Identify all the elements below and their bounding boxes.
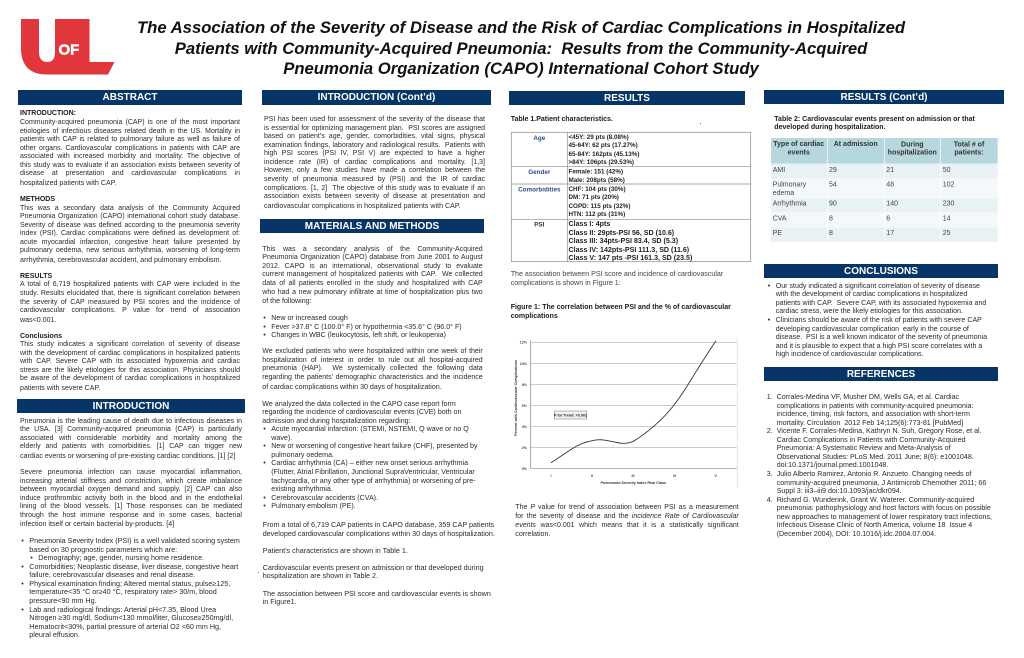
list: references: 3. xyxy=(767,470,773,478)
text: PSI assessment paragraph: severity of pneumonia measured by (PSI) and the IR of cardiac xyxy=(264,176,485,183)
table 1: patient characteristics: Class V: 147 pts -PSI 161.3, SD (23.5) xyxy=(568,254,693,262)
text: abstract body xyxy=(20,110,240,392)
table 2: cardiovascular events xyxy=(771,138,998,242)
list: references: 4. xyxy=(767,496,773,504)
heading: introduction xyxy=(17,399,245,413)
text: P value interpretation: events was<0.001 which means that it is a statistically significant xyxy=(515,522,739,529)
text: methods description: admission and during hospitalization regarding: xyxy=(262,417,411,425)
list: references: Vicente F. Corrales-Medina, Kathryn N. Suh, Gregory Rose, et al. xyxy=(777,427,982,435)
text: abstract body: Community-acquired pneumonia (CAP) is one of the most important xyxy=(20,119,240,126)
text: methods description: Pneumonia Organization (CAPO) database from June 2001 to August xyxy=(262,254,483,261)
table 2: cardiovascular events: edema xyxy=(773,190,794,197)
text: abstract body: acute myocardial infarction, congestive heart failure presented by xyxy=(20,239,240,246)
text: abstract body: with the development of cardiac complications in hospitalized patients xyxy=(20,350,240,357)
text: abstract body: METHODS xyxy=(20,196,55,203)
list: conclusions: and it is plausible to expect that a high PSI score correlates with a xyxy=(776,342,982,350)
text: cohort summary: From a total of 6,719 CAP patients in CAPO database, 359 CAP patients xyxy=(263,520,494,529)
table 2: cardiovascular events: During xyxy=(901,141,924,148)
list: conclusions: high incidence of cardiovascular complications. xyxy=(776,350,924,358)
text: methods description: pulmonary oedema. xyxy=(271,451,334,459)
table 2: cardiovascular events: 50 xyxy=(943,166,951,173)
caption: table 1: Table 1.Patient characteristics. xyxy=(511,116,613,123)
panel: references xyxy=(764,367,998,538)
table 2: cardiovascular events: 21 xyxy=(886,166,894,173)
table 2: cardiovascular events: 25 xyxy=(943,230,951,237)
text: PSI assessment paragraph: PSI has been used for assessment of the severity of the disease that xyxy=(264,116,485,123)
table 1: patient characteristics: Age xyxy=(533,135,546,142)
table 1: patient characteristics: DM: 71 pts (20%) xyxy=(568,194,619,201)
title: Pneumonia Organization (CAPO) International Cohort Study xyxy=(283,59,759,78)
heading: references: REFERENCES xyxy=(847,369,915,380)
table 2: cardiovascular events: 8 xyxy=(829,230,833,237)
text: methods description: regarding the patients’ demographic characteristics and the incidence xyxy=(262,374,483,381)
title: The Association of the Severity of Disease and the Risk of Cardiac Complications in Hospitalized xyxy=(137,18,905,37)
list: conclusions: patients with CAP. Severe CAP, with its associated hypoxemia and xyxy=(776,299,986,307)
text: abstract body: RESULTS xyxy=(20,273,52,280)
list: references: Corrales-Medina VF, Musher DM, Wells GA, et al. Cardiac xyxy=(777,393,959,401)
table 1: patient characteristics: >84Y: 106pts (29.53%) xyxy=(568,159,634,166)
heading: abstract: ABSTRACT xyxy=(102,92,158,103)
text: methods description: current management of hospitalized patients with CAP. We collected xyxy=(262,271,483,278)
table 2: cardiovascular events: Total # of xyxy=(954,141,985,148)
table 2: cardiovascular events: Type of cardiac xyxy=(773,141,824,148)
table 2: cardiovascular events: Arrhythmia xyxy=(773,200,807,207)
text: PSI assessment paragraph xyxy=(264,116,485,210)
text: abstract body: with CAP. Severe CAP with its associated hypoxemia and cardiac xyxy=(20,358,240,365)
table 1: patient characteristics: HTN: 112 pts (31%) xyxy=(568,211,625,218)
text: introduction paragraphs: Pneumonia is the leading cause of death due to infectious diseases in xyxy=(20,418,242,425)
table 2: cardiovascular events: 8 xyxy=(829,215,833,222)
list: references: Pneumonia: A Systematic Review and Meta-Analysis of xyxy=(777,444,951,452)
table 1: patient characteristics: PSI xyxy=(534,222,545,228)
text: methods description: data of all patients enrolled in the study and hospitalized with CAP xyxy=(262,280,483,287)
text: abstract body: Severity of disease was defined according to the pneumonia severity xyxy=(20,222,240,229)
text: abstract body: associated with increased morbidity and mortality. The objective of xyxy=(20,153,240,160)
text: cohort summary: Patient’s characteristics are shown in Table 1. xyxy=(263,546,408,555)
caption: figure 1: complications xyxy=(511,313,558,320)
list: PSI parameters: pleural effusion. xyxy=(29,630,80,639)
text: association note: complications is shown in Figure 1: xyxy=(511,279,621,287)
table 1: patient characteristics: Class II: 29pts-PSI 56, SD (10.6) xyxy=(568,229,675,237)
list: references: complications in patients with community-acquired pneumonia: xyxy=(777,402,973,410)
text: introduction paragraphs: infection itself or certain bacterial by-products. [4] xyxy=(20,520,174,528)
table 2: cardiovascular events: 14 xyxy=(943,215,951,222)
list: references: new approaches to management of lower respiratory tract infections, xyxy=(777,513,992,521)
table 2: cardiovascular events: 48 xyxy=(886,181,894,188)
list: references: incidence, timing, risk factors, and association with short-term xyxy=(777,410,970,418)
table 2: cardiovascular events: 6 xyxy=(886,215,890,222)
list: conclusions: Our study indicated a significant correlation of severity of disease xyxy=(776,282,980,290)
line chart: figure 1: 10% xyxy=(520,362,528,366)
heading: abstract xyxy=(18,90,242,105)
panel: abstract xyxy=(18,90,242,392)
text: abstract body: hospitalized patients with CAP. xyxy=(20,179,116,187)
table 2: cardiovascular events: 230 xyxy=(943,200,954,207)
line chart: figure 1: 6% xyxy=(522,404,528,408)
table 2: cardiovascular events: PE xyxy=(773,230,782,237)
caption: figure 1: Figure 1: The correlation between PSI and the % of cardiovascular xyxy=(511,304,731,311)
list: conclusions: with the development of cardiac complications in hospitalized xyxy=(776,290,967,298)
text: abstract body: the severity of CAP measured by PSI scores and the incidence of xyxy=(20,299,240,306)
text: methods description: This was a secondary analysis of the Community-Acquired xyxy=(262,246,483,253)
text: introduction paragraphs: elderly and patients with comorbidities. [1] CAP can trigger new xyxy=(20,443,242,450)
list: PSI parameters: Lab and radiological findings: Arterial pH<7.35, Blood Urea xyxy=(29,605,216,614)
heading: results continued xyxy=(764,90,1004,104)
text: PSI assessment paragraph: is essential for optimizing management plan. PSI scores are assigned xyxy=(264,125,485,132)
text: introduction paragraphs: between myocardial oxygen demand and supply. [2] CAP can also xyxy=(20,486,242,493)
list: PSI parameters: Demography; age, gender, nursing home residence. xyxy=(38,553,204,562)
text: methods description: 2012. CAPO is an international, observational study to evaluate xyxy=(262,263,483,270)
text: abstract body: etiologies of infectious diseases related death in the US. Mortality in xyxy=(20,128,240,135)
list: references: community-acquired pneumonia, J Antimicrob Chemother 2011; 66 xyxy=(777,479,986,487)
text: introduction paragraphs: through the host immune response and in some cases, bacterial xyxy=(20,512,242,519)
text: P value interpretation: correlation. xyxy=(515,530,550,538)
table 1: patient characteristics: Gender xyxy=(528,169,551,176)
text: abstract body: study. Results elucidated that, there is significant correlation between xyxy=(20,290,240,297)
heading: introduction continued xyxy=(262,90,491,105)
text: methods description: who had a new pulmonary infiltrate at time of hospitalization plus two xyxy=(262,289,483,296)
text: methods description: Cerebrovascular accidents (CVA). xyxy=(271,494,378,502)
caption: table 2: Table 2: Cardiovascular events present on admission or that xyxy=(774,116,975,123)
text: abstract body: this study was to evaluate if an association exists between severity of xyxy=(20,162,240,169)
table 2: cardiovascular events: 140 xyxy=(886,200,898,207)
heading: references xyxy=(764,367,998,381)
text: methods description: wave). xyxy=(271,434,292,442)
table 1: patient characteristics: Class IV: 142pts-PSI 111.3, SD (11.6) xyxy=(568,246,690,254)
list: references: (December 2004), DOI: 10.1016/j.idc.2004.07.004. xyxy=(777,530,936,538)
table 2: cardiovascular events: 102 xyxy=(943,181,954,188)
text: abstract body: arrhythmia, cerebrovascular accident, and pulmonary embolism. xyxy=(20,256,221,264)
text: methods description: Fever >37.8° C (100.0° F) or hypothermia <35.6° C (96.0° F) xyxy=(271,323,462,331)
panel: introduction xyxy=(17,399,245,639)
text: PSI assessment paragraph: association exists between severity of disease at presentation and xyxy=(264,193,485,200)
text: cohort summary: The association between PSI score and cardiovascular events is shown xyxy=(263,589,491,598)
list: references xyxy=(766,393,992,538)
text: introduction paragraphs: cardiac events or worsening of pre-existing cardiac conditions. [1] [2] xyxy=(20,452,235,460)
line chart: figure 1: Percent with Cardiovascular Complications xyxy=(514,360,518,436)
table 2: cardiovascular events: CVA xyxy=(773,215,787,222)
text: association note: The association between PSI score and incidence of cardiovascular xyxy=(511,270,723,278)
panel: materials and methods xyxy=(260,219,495,606)
table 2: cardiovascular events: hospitalization xyxy=(888,149,937,156)
text: PSI assessment paragraph: cardiovascular complications in hospitalized patients with CAP. xyxy=(264,202,461,210)
table 1: patient characteristics: 65-84Y: 162pts (45.13%) xyxy=(568,151,639,158)
text: abstract body: index (PSI). Cardiac complications were defined as development of: xyxy=(20,230,240,237)
text: abstract body: Conclusions xyxy=(20,333,62,340)
text: methods description: We excluded patients who were hospitalized within one week of their xyxy=(262,348,483,355)
text: introduction paragraphs xyxy=(20,418,242,528)
logo: University of Louisville: OF xyxy=(58,42,79,58)
list: references: Julio Alberto Ramirez, Antonio R. Anzueto. Changing needs of xyxy=(777,470,972,478)
line chart: figure 1: Pneumonia Severity Index Risk Class xyxy=(601,481,666,485)
line chart: figure 1 xyxy=(514,337,738,488)
list: conclusions xyxy=(768,282,988,358)
table 1: patient characteristics: COPD: 115 pts (32%) xyxy=(568,203,630,210)
line chart: figure 1: 4% xyxy=(522,425,528,429)
table 1: patient characteristics: CHF: 104 pts (30%) xyxy=(568,186,626,193)
list: references: doi:10.1371/journal.pmed.1001048. xyxy=(777,461,888,469)
list: conclusions: disease. PSI is a well known indicator of the severity of pneumonia xyxy=(776,333,987,341)
table 1: patient characteristics: Class III: 34pts-PSI 83.4, SD (5.3) xyxy=(568,237,679,245)
text: association note xyxy=(510,270,724,287)
logo: University of Louisville xyxy=(21,19,114,74)
text: abstract body: disease at presentation and cardiovascular complications in xyxy=(20,170,240,177)
heading: materials and methods xyxy=(260,219,484,233)
title xyxy=(137,18,906,78)
table 2: cardiovascular events: Pulmonary xyxy=(773,181,807,188)
list: references: 1. xyxy=(767,393,773,401)
text: methods description xyxy=(262,246,483,510)
caption: table 2 xyxy=(774,116,975,131)
heading: introduction: INTRODUCTION xyxy=(93,401,169,412)
text: methods description: of cardiac complications within 30 days of hospitalization. xyxy=(262,383,442,391)
panel: results xyxy=(509,91,752,538)
list: PSI parameters: Physical examination finding; Altered mental status, pulse≥125, xyxy=(29,579,230,588)
text: methods description: Cardiac arrhythmia (CA) – either new onset serious arrhythmia xyxy=(271,459,468,467)
table 1: patient characteristics: Comorbidities xyxy=(518,186,561,194)
line chart: figure 1: 2% xyxy=(522,446,528,450)
text: abstract body: This study indicates a significant correlation of severity of disease xyxy=(20,341,240,348)
table 1: patient characteristics: Class I: 4pts xyxy=(568,220,610,228)
text: abstract body: stress are the likely etiologies for this association. Physicians should xyxy=(20,367,240,374)
text: abstract body: INTRODUCTION: xyxy=(20,110,76,117)
list: PSI parameters: failure, cerebrovascular diseases and renal disease. xyxy=(29,570,195,579)
list: conclusions: cardiac stress, were the likely etiologies for this association. xyxy=(776,307,963,315)
text: P value interpretation: for the severity of disease and the incidence Rate of Cardiovascular xyxy=(515,513,739,520)
table 2: cardiovascular events: AMI xyxy=(773,166,785,173)
heading: results continued: RESULTS (Cont’d) xyxy=(840,92,928,103)
heading: results: RESULTS xyxy=(604,93,650,104)
text: PSI assessment paragraph: incidence rate (IR) of cardiac complications and mortality. [1,3] xyxy=(264,159,485,166)
table 2: cardiovascular events: events xyxy=(788,149,810,156)
text: methods description: hospitalization of interest in order to rule out all hospital-acquired xyxy=(262,357,483,364)
text: abstract body: other organs. Cardiovascular complications in patients with CAP are xyxy=(20,145,240,152)
text: methods description: Changes in WBC (leukocytosis, left shift, or leukopenia) xyxy=(271,331,446,339)
table 1: patient characteristics: Male: 208pts (58%) xyxy=(568,177,625,184)
table 1: patient characteristics: 45-64Y: 62 pts (17.27%) xyxy=(568,142,638,149)
list: references: Cardiac Complications in Patients with Community-Acquired xyxy=(777,436,966,444)
table 1: patient characteristics: Female: 151 (42%) xyxy=(568,168,623,176)
text: methods description: New or increased cough xyxy=(271,314,348,322)
text: cohort summary: Cardiovascular events present on admission or that developed during xyxy=(263,563,484,572)
list: PSI parameters: Hematocrit<30%, partial pressure of arterial O2 <60 mm Hg, xyxy=(29,622,221,631)
text: PSI assessment paragraph: examination findings, laboratory and radiological results. Patients with xyxy=(264,142,485,149)
text: abstract body: be aware of the development of cardiac complications in hospitalized xyxy=(20,375,240,382)
line chart: figure 1: 12% xyxy=(520,340,528,344)
caption: table 2: developed during hospitalization. xyxy=(774,124,886,131)
heading: conclusions: CONCLUSIONS xyxy=(844,266,918,277)
text: abstract body: pulmonary oedema, new serious arrhythmia, worsening of long-term xyxy=(20,247,240,254)
text: P value interpretation xyxy=(515,504,739,538)
text: methods description: Acute myocardial infarction: (STEMI, NSTEMI, Q wave or no Q xyxy=(271,425,469,433)
table 1: patient characteristics xyxy=(510,132,752,262)
list: references: Infectious Disease Clinic of North America, volume 18 Issue 4 xyxy=(777,521,972,529)
text: methods description: existing arrhythmia. xyxy=(271,485,333,493)
text: PSI assessment paragraph: based on patient’s age, gender, comorbidities, vital signs, physical xyxy=(264,133,485,140)
list: conclusions: Clinicians should be aware of the risk of patients with severe CAP xyxy=(776,316,982,324)
list: PSI parameters: Comorbidities; Neoplastic disease, liver disease, congestive heart xyxy=(29,562,238,571)
line chart: figure 1: P for Trend: <0.001 xyxy=(554,413,587,417)
line chart: figure 1: IV xyxy=(673,474,677,478)
list: PSI parameters: based on 30 prognostic parameters which are: xyxy=(29,545,177,554)
text: methods description: regarding the incidence of cardiovascular events (CVE) both on xyxy=(262,408,461,416)
line chart: figure 1: III xyxy=(632,474,634,478)
text: methods description: pneumonia (HAP). We systemically collected the following data xyxy=(262,365,483,372)
text: abstract body: patients with CAP is related to pulmonary failure as well as failure of xyxy=(20,136,240,143)
list: references: Suppl 3: iii3–iii9 doi:10.1093/jac/dkr094. xyxy=(777,487,902,495)
text: methods description: Pulmonary embolism (PE). xyxy=(271,502,356,510)
text: abstract body: patients with severe CAP. xyxy=(20,384,100,392)
table 2: cardiovascular events: At admission xyxy=(834,141,878,148)
list: conclusions: developing cardiovascular complication early in the course of xyxy=(776,325,969,333)
table 2: cardiovascular events: 54 xyxy=(829,181,837,188)
text: introduction paragraphs: the USA. [3] Community-acquired pneumonia (CAP) is particularly xyxy=(20,426,242,433)
list: PSI parameters xyxy=(22,536,240,639)
panel: introduction continued xyxy=(262,90,491,210)
text: introduction paragraphs: Severe pneumonia infection can cause myocardial inflammation, xyxy=(20,469,242,476)
list: references: 2. xyxy=(767,427,773,435)
text: P value interpretation: The P value for trend of association between PSI as a measurement xyxy=(515,504,739,511)
list: references: mortality. Circulation 2012 Feb 14;125(6):773-81 [PubMed] xyxy=(777,419,963,427)
heading: introduction continued: INTRODUCTION (Cont’d) xyxy=(318,92,435,103)
text: abstract body: cardiovascular complications. P value for trend of association xyxy=(20,307,240,314)
line chart: figure 1: II xyxy=(591,474,593,478)
heading: results xyxy=(509,91,745,105)
title: Patients with Community-Acquired Pneumonia: Results from the Community-Acquired xyxy=(175,38,867,58)
text: methods description: We analyzed the data collected in the CAPO case report form xyxy=(262,400,456,408)
list: PSI parameters: pressure<90 mm Hg. xyxy=(29,596,97,605)
text: PSI assessment paragraph: high PSI scores (PSI IV, PSI V) are expected to have a higher xyxy=(264,150,485,157)
heading: conclusions xyxy=(764,264,998,278)
list: references: Richard G. Wunderink, Grant W. Waterer. Community-acquired xyxy=(777,496,974,504)
caption: figure 1 xyxy=(511,304,731,320)
list: references: pneumonia: pathophysiology and host factors with focus on possible xyxy=(777,504,991,512)
table 2: cardiovascular events: patients: xyxy=(954,149,984,156)
line chart: figure 1: 0% xyxy=(522,467,528,471)
text: abstract body: Pneumonia Organization (CAPO) international cohort study database. xyxy=(20,213,240,220)
text: cohort summary: developed cardiovascular complications within 30 days of hospitalization. xyxy=(263,529,495,538)
text: abstract body: A total of 6,719 hospitalized patients with CAP were included in the xyxy=(20,281,240,288)
text: introduction paragraphs: increasing arterial stiffness and constriction, which create imbalance xyxy=(20,478,242,485)
text: methods description: (Flutter, Atrial Fibrillation, Junctional SupraVentricular, Ventricular xyxy=(271,468,475,476)
text: cohort summary xyxy=(262,520,495,606)
list: references: Observational Studies: PLoS Med. 2011 June; 8(6): e1001048. xyxy=(777,453,974,461)
text: cohort summary: hospitalization are shown in Table 2. xyxy=(263,571,378,580)
text: PSI assessment paragraph: However, only a few studies have made a correlation between the xyxy=(264,167,485,174)
panel: conclusions xyxy=(764,264,998,358)
line chart: figure 1: I xyxy=(550,474,552,478)
heading: materials and methods: MATERIALS AND METHODS xyxy=(305,221,439,232)
list: PSI parameters: Nitrogen ≥30 mg/dl, Sodium<130 mmol/liter, Glucose≥250mg/dl, xyxy=(29,613,233,622)
list: PSI parameters: temperature<35 °C or≥40 °C, respiratory rate> 30/m, blood xyxy=(29,587,217,596)
table 1: patient characteristics: <45Y: 29 pts (8.08%) xyxy=(568,134,629,141)
table 2: cardiovascular events: 90 xyxy=(829,200,837,207)
text: introduction paragraphs: lining of the blood vessels. [1] Those responses can be mediated xyxy=(20,503,242,510)
panel: results continued xyxy=(764,90,1004,242)
table 2: cardiovascular events: 17 xyxy=(886,230,894,237)
line chart: figure 1: 8% xyxy=(522,383,528,387)
text: introduction paragraphs: induce prothrombic activity both in the blood and in the endothelial xyxy=(20,495,242,502)
text: abstract body: was<0.001. xyxy=(20,316,56,324)
text: cohort summary: in Figure1. xyxy=(263,597,297,606)
text: methods description: New or worsening of congestive heart failure (CHF), presented by xyxy=(271,442,478,450)
table 2: cardiovascular events: 29 xyxy=(829,166,837,173)
text: methods description: of the following: xyxy=(262,297,312,305)
text: introduction paragraphs: associated with considerable morbidity and mortality among the xyxy=(20,435,242,442)
list: PSI parameters: Pneumonia Severity Index (PSI) is a well validated scoring system xyxy=(29,536,240,545)
text: abstract body: This was a secondary data analysis of the Community Acquired xyxy=(20,204,240,212)
text: PSI assessment paragraph: complications. [1, 2] The objective of this study was to evaluate if an xyxy=(264,185,485,192)
line chart: figure 1: V xyxy=(714,474,717,478)
text: methods description: tachycardia, or any other type of arrhythmia) or worsening of pre- xyxy=(271,477,476,485)
